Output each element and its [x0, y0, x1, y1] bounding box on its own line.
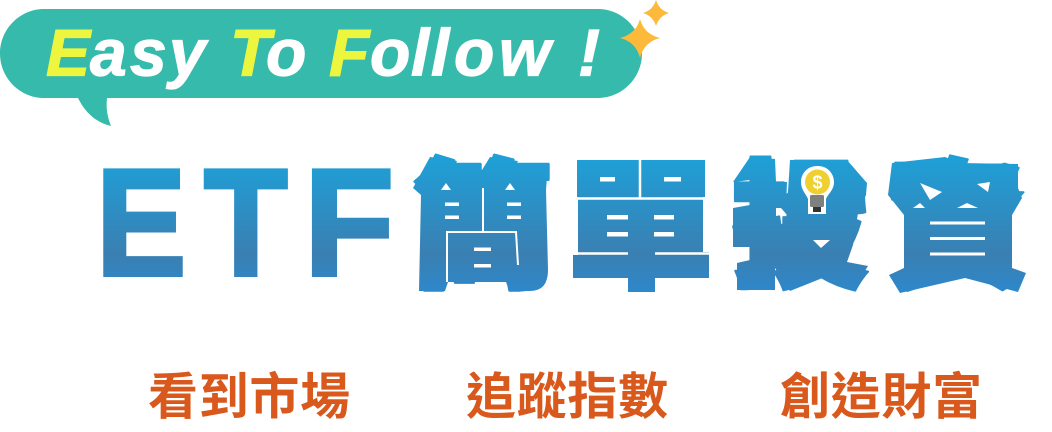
speech bubble badge: [0, 9, 642, 126]
title: E: E: [96, 139, 186, 308]
badge text: E: [46, 16, 92, 90]
slogan: 追蹤指數: 追蹤指數: [466, 369, 669, 425]
title: T: T: [204, 137, 288, 308]
badge text: o: [266, 16, 306, 90]
main title: [96, 137, 1028, 308]
title: F: F: [304, 137, 394, 307]
title: 簡: 簡: [412, 149, 553, 307]
badge text: T: [230, 16, 275, 90]
bubble body: [0, 9, 642, 126]
slogan: 創造財富: 創造財富: [780, 369, 983, 425]
slogans: [148, 369, 983, 425]
title: 資: 資: [887, 149, 1028, 307]
badge text: asy: [90, 16, 209, 90]
title: 投: 投: [730, 149, 871, 307]
icon: light bulb: [801, 166, 834, 214]
icon: sparkles: [620, 0, 669, 58]
title: 單: 單: [571, 149, 712, 307]
icon: light bulb: $: [812, 172, 823, 192]
badge text: !: [578, 16, 600, 90]
slogan: 看到市場: 看到市場: [148, 369, 351, 425]
badge text: ollow: [370, 16, 554, 90]
badge text: F: [329, 16, 371, 90]
